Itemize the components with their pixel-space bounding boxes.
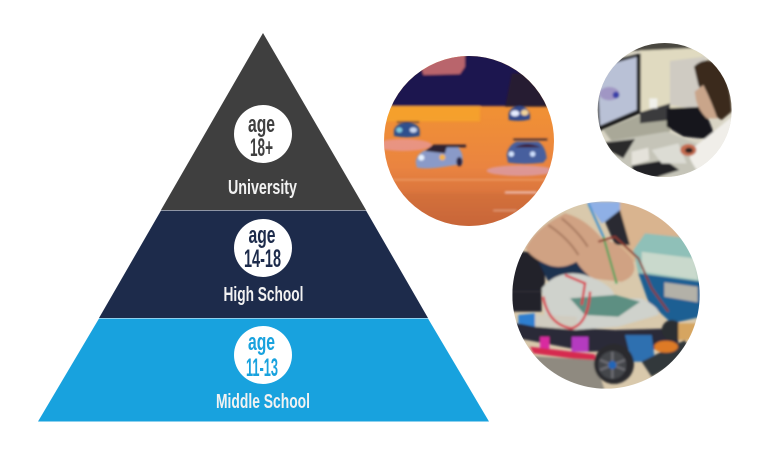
- badge: age 18+: 18+: [250, 134, 273, 162]
- badge: age 14-18: 14-18: [244, 245, 281, 273]
- photo: student at computer workstation: [598, 43, 732, 177]
- badge: age 14-18: age: [248, 222, 276, 249]
- car: right: [507, 139, 547, 164]
- car: center: [416, 145, 466, 168]
- car: left: [394, 121, 420, 137]
- badge: age 14-18: [234, 219, 292, 277]
- label: Middle School: Middle School: [216, 391, 310, 413]
- tier: middle school: [38, 318, 489, 422]
- badge: age 11-13: 11-13: [246, 354, 278, 382]
- robot car chassis: [510, 273, 698, 392]
- label: University: University: [228, 177, 298, 199]
- wheel: [594, 344, 634, 384]
- car: top right: [509, 106, 530, 121]
- badge: age 11-13: age: [248, 329, 275, 356]
- hands: [526, 213, 634, 282]
- blue instrument: [638, 273, 702, 323]
- label: High School: High School: [224, 284, 304, 306]
- photo: model race cars on orange track: [384, 56, 554, 226]
- photo: hands building robot car: [512, 202, 700, 389]
- badge: age 18+: [234, 105, 292, 163]
- badge: age 11-13: [234, 326, 292, 384]
- infographic: [38, 33, 732, 422]
- tier: high school: [99, 210, 428, 318]
- tier: university: [161, 33, 366, 210]
- student: [680, 61, 732, 178]
- badge: age 18+: age: [248, 111, 275, 138]
- pyramid: [38, 33, 489, 422]
- monitor: [595, 53, 641, 132]
